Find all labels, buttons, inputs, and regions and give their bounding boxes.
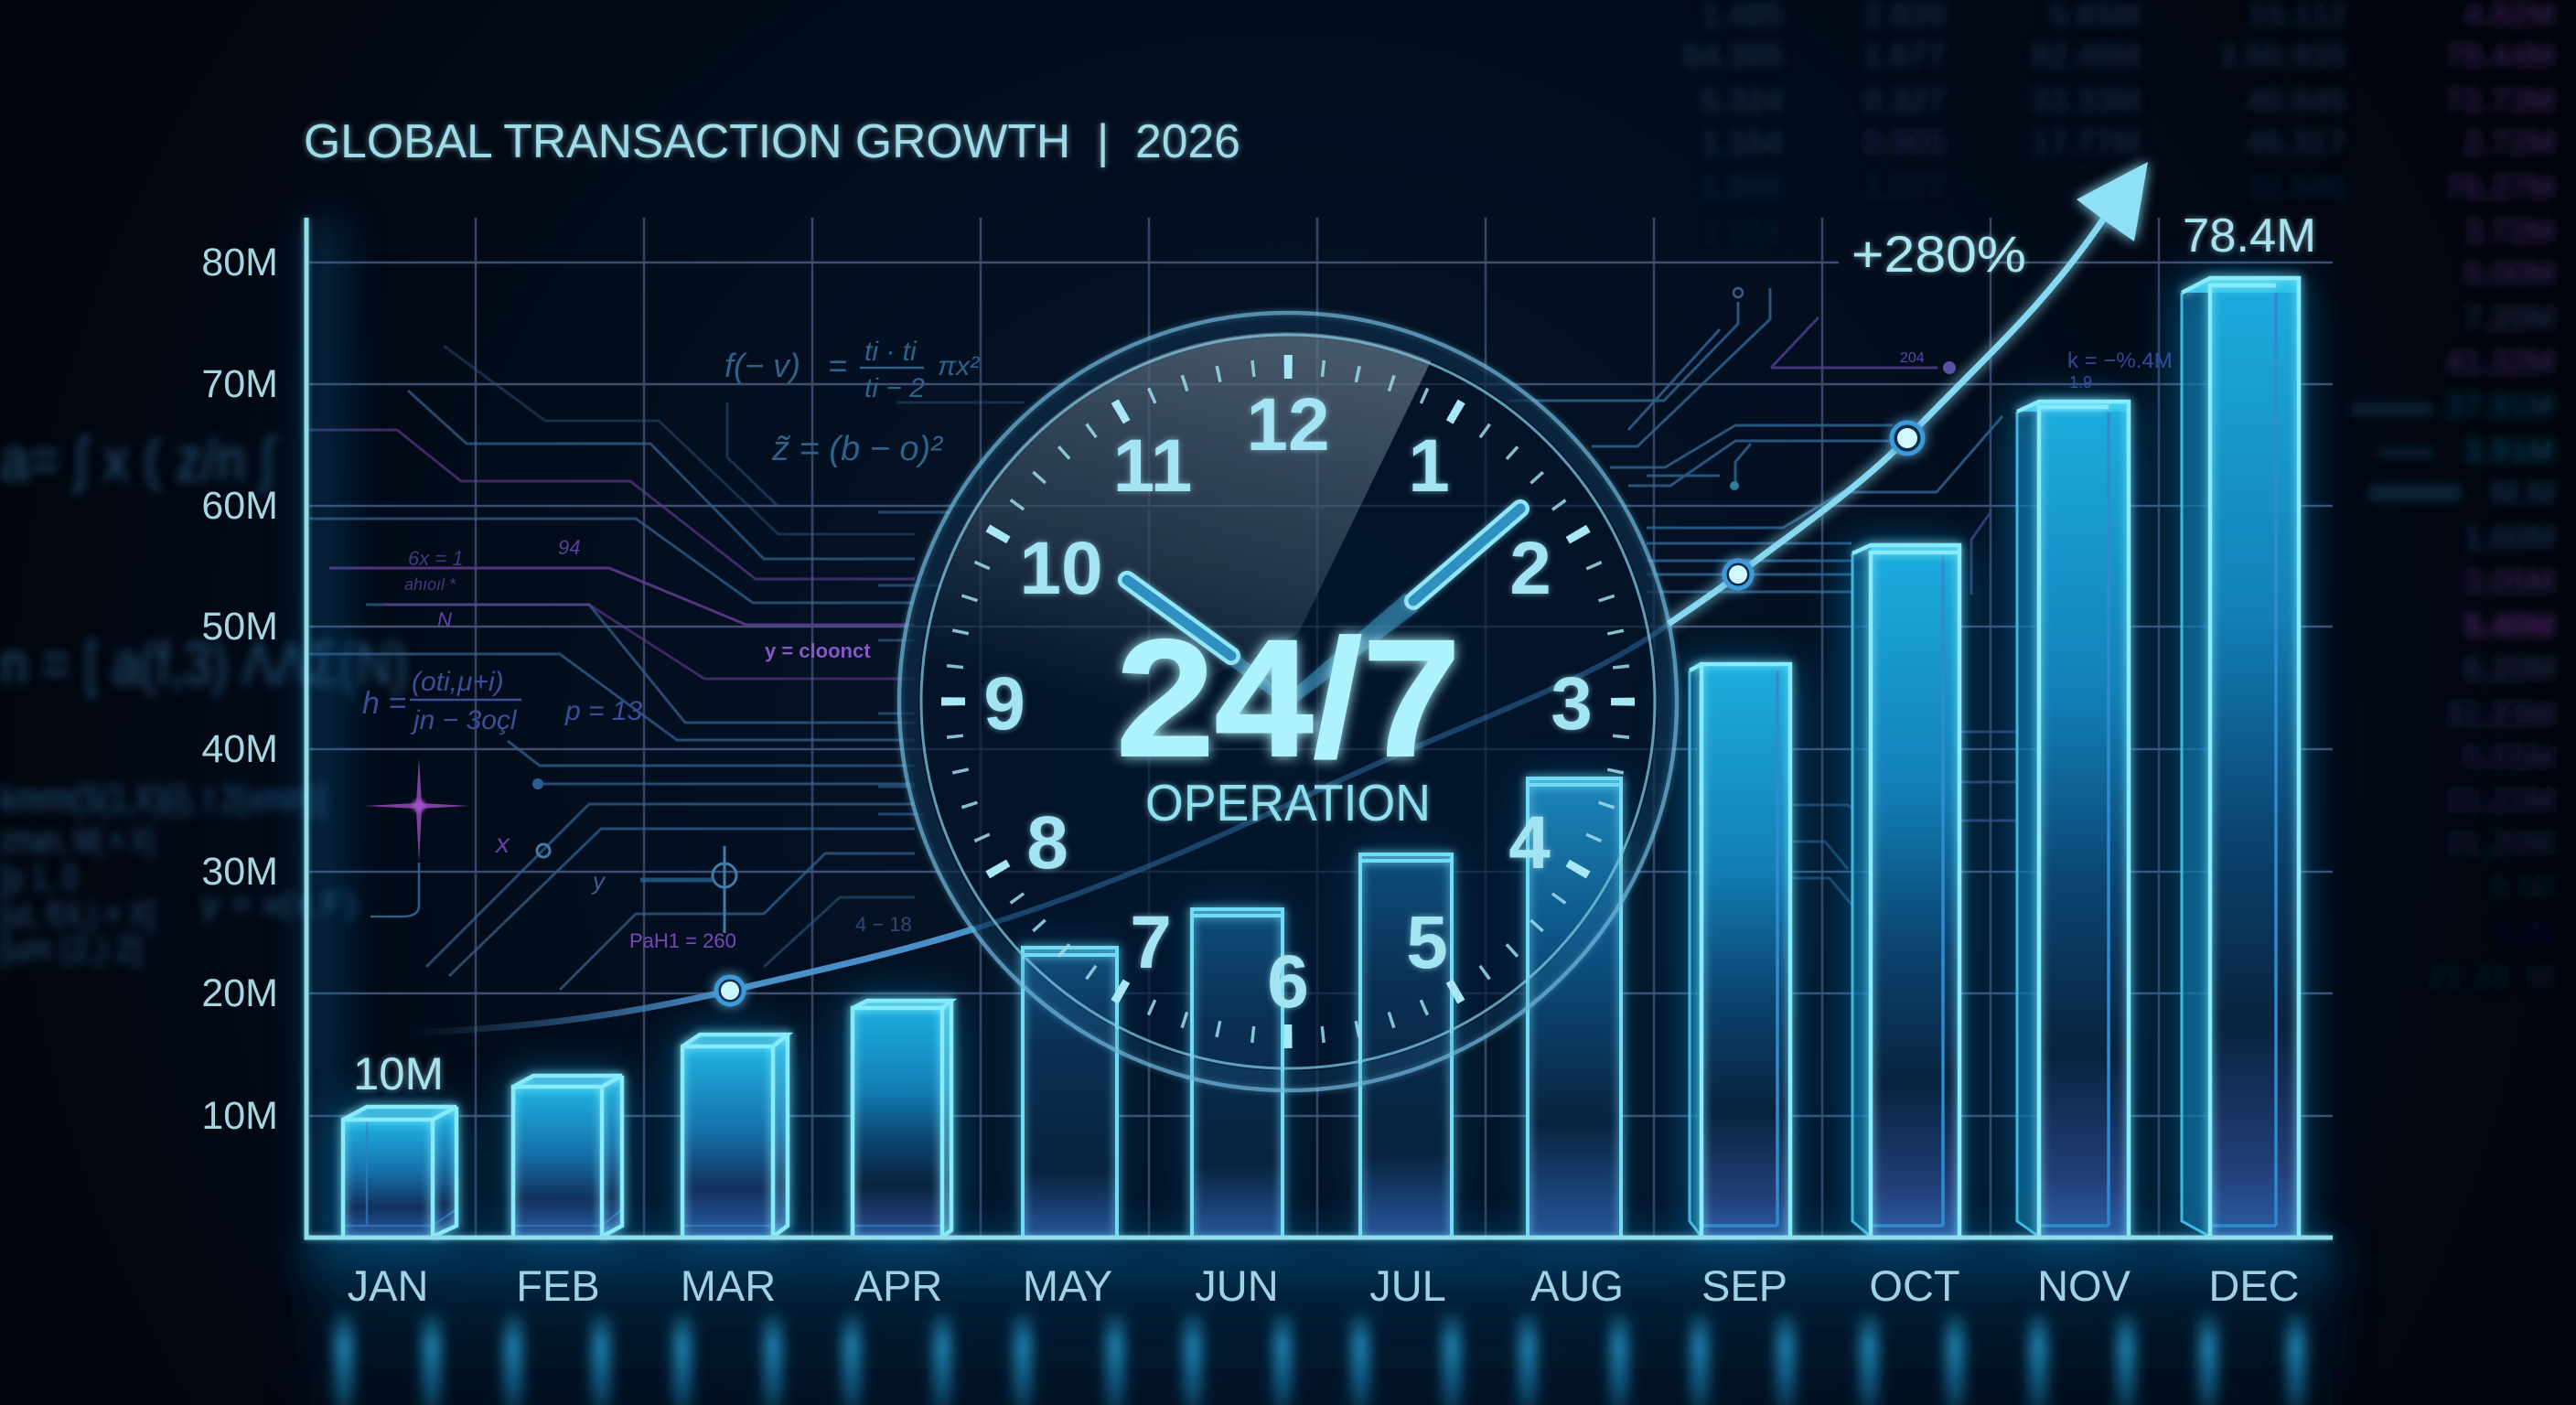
blurred formulas on the left: kmrm(S(1,X)(i), t 2(xmm)] <box>0 777 327 820</box>
small labels: 6x = 1 <box>408 547 464 570</box>
bar: FEB <box>513 1076 622 1237</box>
formula: f(v): f(− v) <box>724 347 800 384</box>
formula: h: h = <box>362 686 406 721</box>
growth curve and arrow <box>1669 162 2148 624</box>
formula: h <box>362 667 643 735</box>
bars <box>343 278 2299 1237</box>
bar: DEC <box>2182 278 2299 1237</box>
hour hand <box>1127 580 1292 706</box>
data columns: 1.677 <box>1863 37 1946 74</box>
y axis labels: 70M <box>201 362 278 406</box>
highlighted value column: 31.20M <box>2445 824 2555 862</box>
reflection base <box>311 1244 2333 1405</box>
clock glass base <box>900 314 1676 1089</box>
blue traces <box>309 346 1025 990</box>
icon: purple star marker <box>364 758 469 917</box>
clock numerals: 4 <box>1508 801 1551 885</box>
clock numerals: 6 <box>1267 940 1309 1024</box>
highlighted value column: 3.72M <box>2463 212 2555 250</box>
bar: JAN <box>343 1107 456 1237</box>
data columns: 17.77M <box>2031 123 2141 161</box>
formula: f(v): ti − 2 <box>864 373 925 403</box>
clock numerals: 7 <box>1130 901 1172 984</box>
blurred data table on the right <box>1682 0 2555 995</box>
clock numerals: 9 <box>983 662 1025 745</box>
clock numerals: 5 <box>1406 901 1448 984</box>
circuit nodes <box>532 288 1956 857</box>
clock glass highlight wedge <box>928 332 1431 684</box>
chart grid <box>309 218 2333 1237</box>
purple traces <box>309 430 915 679</box>
chart axes <box>306 218 2333 1238</box>
curve: rising part <box>1669 220 2103 624</box>
arrow head <box>2077 162 2148 241</box>
formula: f(v): πx² <box>938 351 980 381</box>
equation labels: 4 − 18 <box>855 913 912 936</box>
formulas <box>362 337 2173 952</box>
purple trace to node <box>1771 317 1937 368</box>
data columns: 33.33M <box>2031 81 2141 119</box>
blurred formulas on the left: [p 1, 0 <box>0 859 78 897</box>
minute hand <box>1284 509 1520 706</box>
curve: through clock <box>972 624 1669 929</box>
clock numerals: 1 <box>1408 424 1450 508</box>
operation label: OPERATION <box>1145 774 1431 832</box>
y axis labels: 60M <box>201 484 278 528</box>
highlighted value column: M.M <box>2491 474 2555 511</box>
x axis month labels: NOV <box>2037 1261 2131 1310</box>
formula: z: z̃ = (b − o)² <box>771 430 943 468</box>
highlighted value column: 41.32M <box>2445 343 2555 381</box>
highlighted value column: 1.00M <box>2463 519 2555 556</box>
data columns <box>1682 0 2346 250</box>
highlighted value column: 78.44M <box>2445 37 2555 74</box>
x axis month labels: MAR <box>681 1261 776 1310</box>
y axis labels: 10M <box>201 1094 278 1138</box>
y axis labels: 40M <box>201 727 278 771</box>
label: +280%: +280% <box>1852 225 2026 283</box>
label: 78.4M: 78.4M <box>2183 209 2316 263</box>
data columns: 3.50.935 <box>2218 37 2346 74</box>
clock minor ticks <box>953 367 1623 1036</box>
small labels: N <box>437 608 452 631</box>
data columns: 11.945 <box>2248 168 2346 206</box>
highlighted value column: 5.50 <box>2491 867 2555 905</box>
data columns: 1.351 <box>1701 212 1783 250</box>
blurred formulas on the left: n = [ a(f,3) ΛΛΣ(N) <box>0 629 408 697</box>
highlighted value column: 5.00M <box>2463 254 2555 292</box>
equation labels: PaH1 = 260 <box>629 929 736 952</box>
y axis labels: 20M <box>201 971 278 1015</box>
formula: f(v): ti · ti <box>864 337 918 367</box>
curve node: OCT <box>1892 423 1923 454</box>
bar: OCT <box>1852 545 1959 1237</box>
clock numerals: 2 <box>1509 527 1551 610</box>
data columns: 40.945 <box>2246 81 2346 119</box>
bar: MAR <box>682 1035 788 1237</box>
x axis month labels <box>348 1261 2300 1310</box>
highlighted value column: 21.23 .M <box>2427 958 2555 995</box>
y axis labels: 50M <box>201 605 278 649</box>
equation labels <box>629 349 2173 952</box>
bar: JUN <box>1192 909 1283 1237</box>
lines beside clock <box>878 512 951 814</box>
curve: left part <box>408 929 972 1033</box>
small labels: 94 <box>558 536 580 559</box>
clock <box>899 313 1677 1090</box>
clock numerals: 11 <box>1113 424 1192 508</box>
x axis month labels: SEP <box>1701 1261 1787 1310</box>
equation labels: k = −%.4M <box>2067 349 2173 373</box>
blurred formulas on the left: [ut, f(4,) × X] <box>0 896 156 934</box>
formula: f(v) <box>724 337 980 403</box>
data columns: $4.385 <box>1682 37 1783 74</box>
highlighted value column: 3.20 <box>2491 912 2555 949</box>
reflection streaks <box>336 1314 2304 1405</box>
data columns: 1.855 <box>1701 168 1783 206</box>
equation labels: 1.9 <box>2069 373 2092 391</box>
highlighted value column: 7.20M <box>2463 299 2555 337</box>
bar: APR <box>853 1001 951 1237</box>
data columns: 0.905 <box>1863 123 1946 161</box>
icon: target node <box>640 846 736 933</box>
blurred formulas on the left: [um (2,) 2] <box>0 930 142 969</box>
formula: f(v): = <box>828 347 847 384</box>
highlighted value column: 31.23M <box>2445 695 2555 733</box>
x axis month labels: JUL <box>1369 1261 1446 1310</box>
data columns: 1.577 <box>1863 168 1946 206</box>
highlighted value column: 3.91M <box>2463 432 2555 469</box>
floor reflection <box>311 1244 2333 1405</box>
clock numerals: 12 <box>1246 383 1330 467</box>
clock outer rings <box>899 313 1677 1090</box>
small labels: ahıoıl * <box>404 575 456 594</box>
bar: NOV <box>2017 402 2129 1237</box>
highlighted value column: 3.05M <box>2463 563 2555 600</box>
highlighted value column: 31.23M <box>2445 781 2555 819</box>
highlighted value column: 6.20M <box>2463 649 2555 687</box>
x axis month labels: OCT <box>1869 1261 1960 1310</box>
purple equation: y = cloonct <box>765 639 871 662</box>
clock numerals: 8 <box>1026 801 1068 885</box>
blurred formulas on the left: zman, M( × X) <box>0 820 156 861</box>
blurred formulas on the left: y = x(x,F) <box>201 885 357 922</box>
curve node: MAR <box>716 977 744 1004</box>
clock numerals <box>983 383 1593 1024</box>
x axis month labels: FEB <box>516 1261 600 1310</box>
curve node: SEP <box>1724 561 1752 588</box>
bar glow <box>338 278 2302 1237</box>
data columns: 82.40M <box>2031 37 2141 74</box>
axis glow <box>305 218 2333 1270</box>
highlighted value column: 2.72M <box>2463 123 2555 161</box>
x axis month labels: JAN <box>348 1261 428 1310</box>
clock numerals: 10 <box>1019 527 1103 610</box>
y axis labels <box>201 241 278 1138</box>
data columns: 45.317 <box>2246 123 2346 161</box>
data columns: 1.154 <box>1701 123 1783 161</box>
bar: AUG <box>1528 778 1621 1237</box>
x axis month labels: APR <box>854 1261 942 1310</box>
24/7 heading: 24/7 <box>1116 605 1461 791</box>
highlighted value column: 5.40M <box>2463 606 2555 644</box>
formula: h: jn − 3oçl <box>410 705 518 735</box>
clock numerals: 3 <box>1551 662 1593 745</box>
small labels: x <box>494 829 510 859</box>
x axis month labels: AUG <box>1530 1261 1624 1310</box>
bar: SEP <box>1690 664 1790 1237</box>
highlighted value column: 76.27M <box>2445 168 2555 206</box>
circuit traces on the left <box>309 346 1025 990</box>
equation labels: 204 <box>1900 350 1925 366</box>
highlighted value column: 37.91M <box>2445 387 2555 424</box>
growth curve behind clock <box>408 624 1669 1033</box>
clock major ticks <box>953 367 1623 1036</box>
label: 10M: 10M <box>353 1048 444 1099</box>
highlighted value column <box>2427 0 2555 995</box>
data columns: 5.324 <box>1701 81 1783 119</box>
bar: MAY <box>1023 948 1117 1237</box>
small labels <box>404 536 606 895</box>
x axis month labels: MAY <box>1023 1261 1112 1310</box>
formula: h: (oti,μ+i) <box>412 667 504 697</box>
y axis labels: 80M <box>201 241 278 284</box>
bar: JUL <box>1360 854 1452 1237</box>
y axis labels: 30M <box>201 850 278 894</box>
highlighted value column: 5.55M <box>2463 738 2555 776</box>
data columns: 0.327 <box>1863 81 1946 119</box>
small labels: y <box>591 867 606 895</box>
blurred formulas on the left <box>0 425 408 969</box>
x axis month labels: DEC <box>2208 1261 2300 1310</box>
x axis month labels: JUN <box>1195 1261 1279 1310</box>
circuit traces on the right <box>1508 288 2017 906</box>
formula: h: p = 13 <box>564 696 643 726</box>
highlighted value column: 72.73M <box>2445 81 2555 119</box>
blurred dashes <box>2351 402 2461 501</box>
title: GLOBAL TRANSACTION GROWTH | 2026 <box>304 115 1240 168</box>
blurred formulas on the left: a= ∫ x ( z/n ∫ <box>0 425 277 493</box>
